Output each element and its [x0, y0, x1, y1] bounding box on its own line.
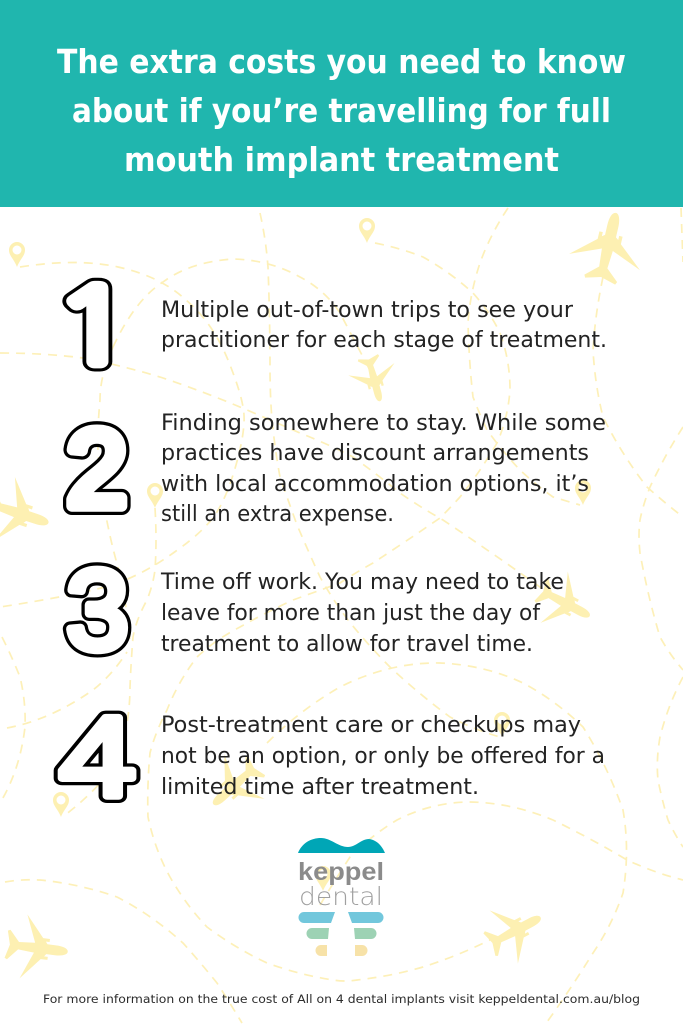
item 2 text: with local accommodation options, it’s — [161, 472, 589, 497]
logo crown — [298, 838, 385, 853]
icon: plane lower left — [2, 912, 72, 984]
number 1: 1 — [55, 275, 132, 378]
map pins — [9, 218, 591, 891]
icon: plane near step 3 — [527, 564, 603, 642]
item 2 text: Finding somewhere to stay. While some — [161, 411, 606, 436]
item 4 text — [161, 713, 605, 800]
item 1 text — [161, 298, 607, 353]
item 1 text: practitioner for each stage of treatment. — [161, 328, 607, 353]
logo wordmark — [298, 858, 384, 911]
logo wordmark: keppel — [298, 858, 384, 886]
item 2 text: practices have discount arrangements — [161, 441, 589, 466]
item 4 text: limited time after treatment. — [161, 775, 479, 800]
item 4 text: not be an option, or only be offered for a — [161, 744, 605, 769]
item 3 text: treatment to allow for travel time. — [161, 632, 533, 657]
item 2 text — [161, 411, 606, 527]
number 1: 1 — [55, 275, 132, 378]
title: The extra costs you need to know — [57, 42, 626, 81]
item 3 text — [160, 570, 564, 657]
item 4 text: Post-treatment care or checkups may — [161, 713, 581, 738]
background dashed flight routes — [0, 208, 683, 1023]
icon: plane top right — [565, 205, 651, 289]
footer note: For more information on the true cost of All on 4 dental implants visit keppeldental.com.au/blog — [43, 992, 640, 1006]
number 4: 4 — [59, 694, 136, 821]
logo wordmark: dental — [299, 882, 383, 911]
number 2: 2 — [66, 408, 127, 530]
icon: plane left edge — [0, 471, 59, 555]
title — [57, 42, 626, 179]
number 3: 3 — [66, 547, 129, 673]
item 3 text: Time off work. You may need to take — [160, 570, 564, 595]
number 4: 4 — [59, 694, 136, 821]
icon: plane near step 1 — [345, 351, 403, 407]
icon: plane lower right — [475, 891, 555, 971]
item 3 text: leave for more than just the day of — [161, 601, 541, 626]
item 2 text: still an extra expense. — [161, 502, 394, 527]
number 2: 2 — [66, 408, 127, 530]
title: mouth implant treatment — [124, 140, 559, 179]
header band — [0, 0, 683, 207]
item 1 text: Multiple out-of-town trips to see your — [161, 298, 573, 323]
icon: plane near step 4 — [193, 743, 277, 827]
number 3: 3 — [66, 547, 129, 673]
title: about if you’re travelling for full — [72, 91, 611, 130]
logo tooth bars — [298, 912, 384, 956]
logo: keppel dental — [298, 838, 385, 956]
